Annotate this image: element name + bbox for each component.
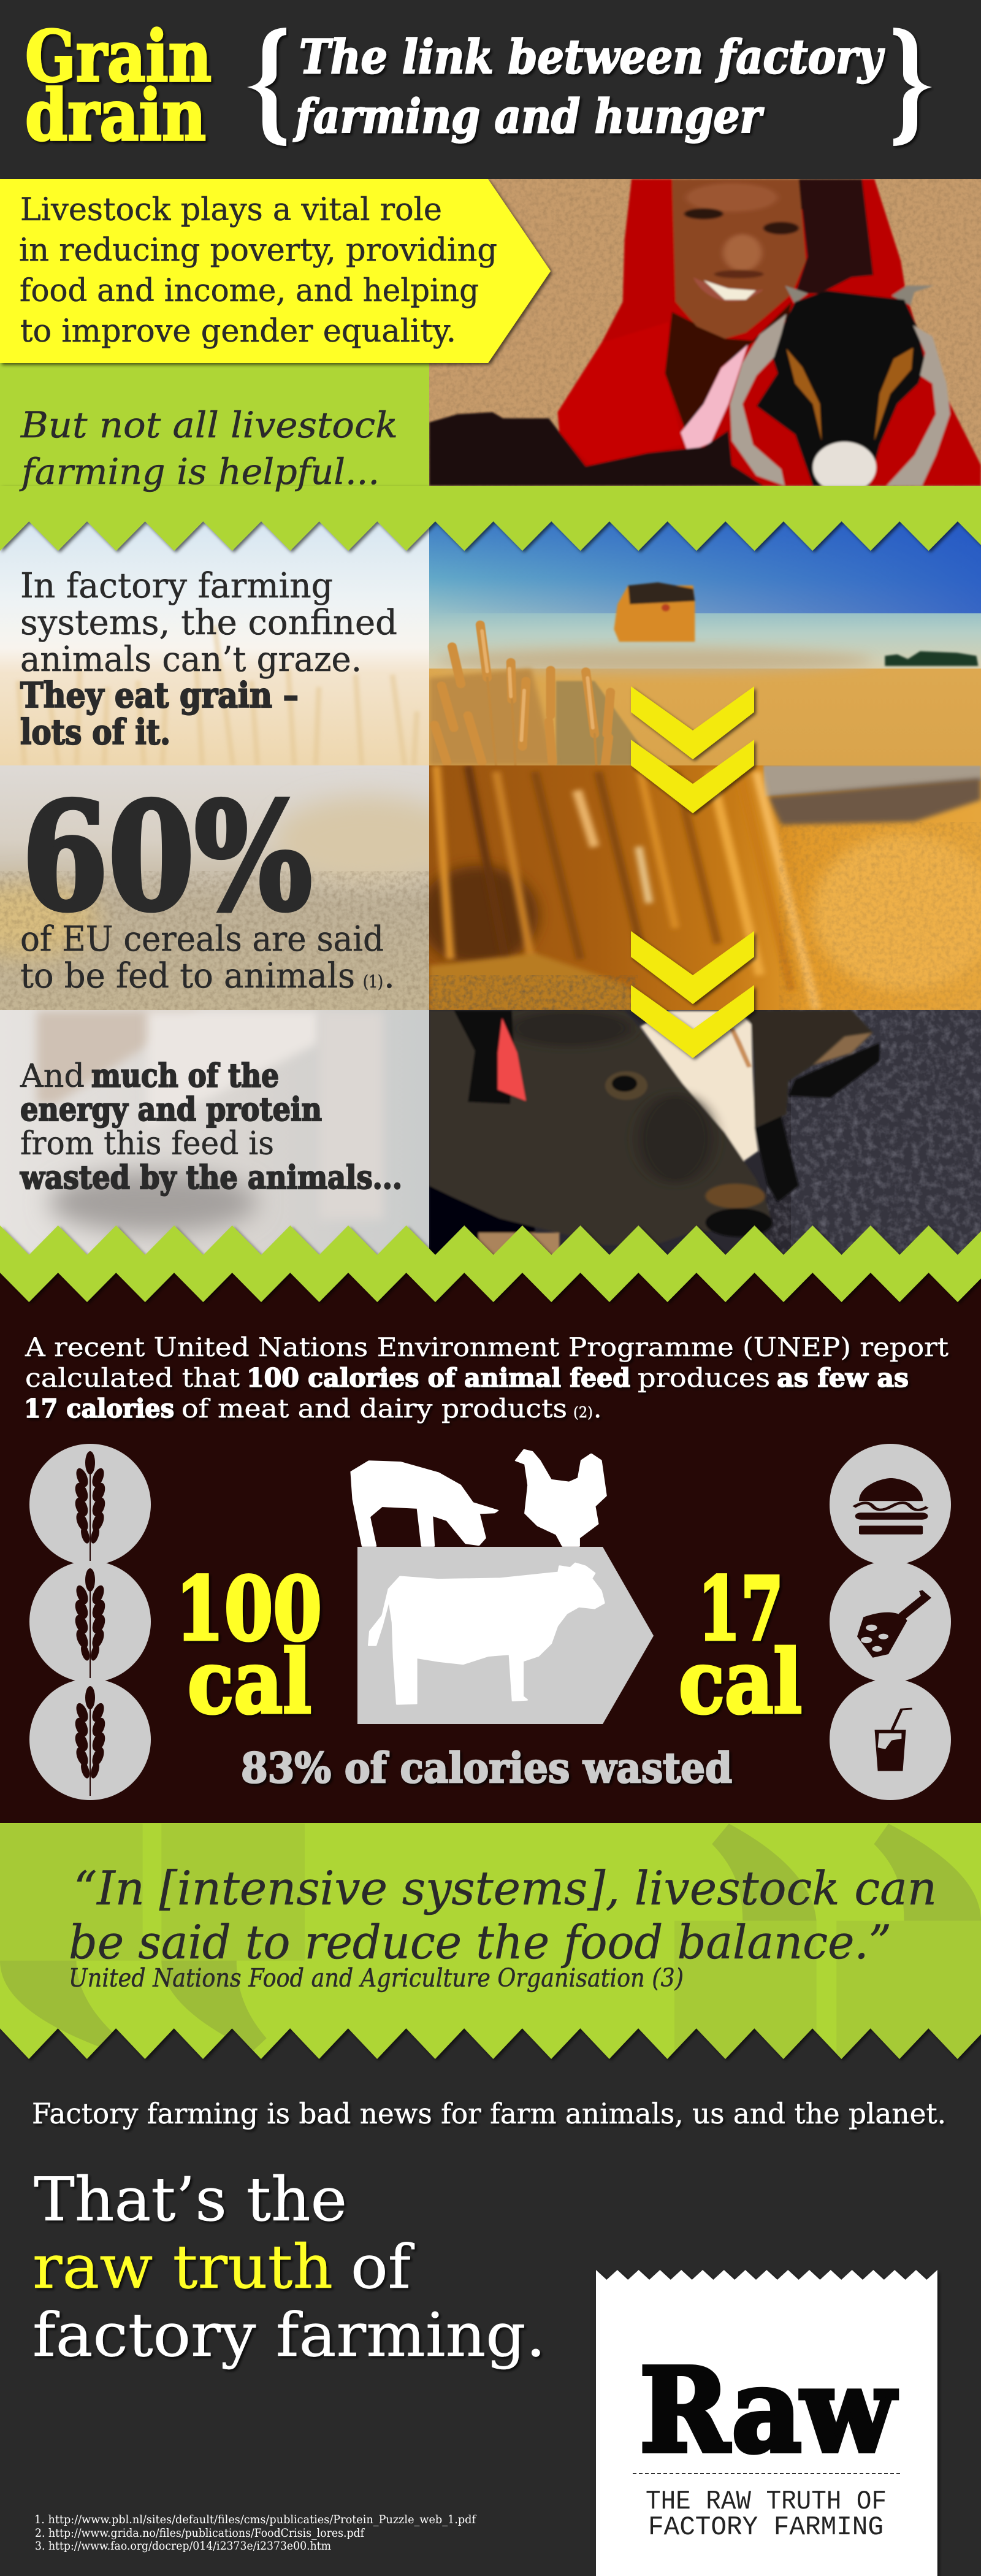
text: factory farming systems: In factory farming — [20, 566, 333, 606]
panel: brown calories background — [0, 1263, 981, 1823]
text: UNEP report — [24, 1332, 949, 1424]
icon: drink — [875, 1709, 912, 1771]
panel: left pale photo column — [0, 515, 460, 1268]
text: but not all livestock — [19, 404, 398, 493]
text: energy and protein wasted: from this feed is — [20, 1125, 274, 1162]
quote attribution: United Nations Food and Agriculture Organisation (3) — [69, 1963, 684, 1993]
icons: food circles — [830, 1444, 951, 1800]
number: 100 cal: 100 — [175, 1558, 322, 1660]
photo: combine harvester in wheat field — [429, 521, 981, 765]
text: but not all livestock: farming is helpful... — [19, 451, 380, 493]
number: 100 cal — [175, 1558, 322, 1733]
callout: yellow livestock box — [0, 179, 551, 363]
icon: pig — [351, 1461, 497, 1546]
quote text: be said to reduce the food balance.” — [69, 1915, 891, 1969]
text: UNEP report: (2) — [573, 1404, 593, 1421]
logo word: Raw — [639, 2343, 897, 2478]
text: 83 percent wasted: 83% of calories wasted — [241, 1744, 732, 1792]
icon: ham — [857, 1591, 929, 1658]
panel: green intro background — [0, 343, 429, 540]
panel: cow pale — [0, 1010, 429, 1268]
photo: falling grain — [429, 765, 981, 1010]
text: factory farming systems — [20, 566, 397, 753]
text: UNEP report: produces — [638, 1363, 770, 1393]
icon: left brace — [247, 28, 286, 146]
text: 60 percent statistic: (1) — [363, 972, 383, 992]
icon: cow — [369, 1563, 604, 1704]
number: 17 cal — [679, 1558, 802, 1733]
callout: yellow livestock box: Livestock plays a vital role — [20, 192, 442, 228]
text: UNEP report: of meat and dairy products — [181, 1393, 567, 1424]
callout: yellow livestock box: in reducing poverty, providing — [19, 232, 497, 269]
callout: yellow livestock box: food and income, and helping — [20, 273, 479, 309]
number: 17 cal: 17 — [698, 1558, 784, 1660]
divider: top green zigzag — [0, 486, 981, 551]
text: UNEP report: calculated that — [25, 1363, 240, 1393]
heading: raw truth: That’s the — [34, 2165, 347, 2235]
text: factory farming systems: animals can’t graze. — [20, 640, 362, 680]
panel: Raw logo card — [596, 2270, 937, 2576]
heading: raw truth: of — [351, 2233, 415, 2302]
subtitle: The link between factory — [299, 29, 885, 84]
panel: header — [25, 15, 932, 156]
quote text — [69, 1861, 937, 1969]
text: footnotes — [34, 2513, 477, 2553]
logo tagline: FACTORY FARMING — [648, 2512, 884, 2543]
heading: raw truth: factory farming. — [32, 2301, 546, 2371]
text: energy and protein wasted: much of the — [91, 1057, 279, 1095]
text: factory farming systems: lots of it. — [20, 712, 170, 753]
logo tagline: THE RAW TRUTH OF — [646, 2486, 887, 2517]
text: energy and protein wasted: wasted by the animals... — [20, 1159, 402, 1197]
icon: burger — [854, 1478, 928, 1535]
text: 60 percent statistic: to be fed to animals — [20, 956, 355, 996]
panel: wheat pale — [0, 515, 429, 765]
icon: right brace — [893, 28, 932, 146]
text: but not all livestock: But not all livestock — [20, 404, 398, 446]
heading: raw truth: raw truth — [32, 2233, 333, 2302]
text: UNEP report: A recent United Nations Environment Programme (UNEP) report — [25, 1332, 949, 1362]
divider: lower green zigzag — [0, 1225, 981, 1302]
text: 60 percent statistic: of EU cereals are said — [20, 919, 384, 959]
text: 60 percent statistic: 60% — [22, 770, 312, 943]
number: 100 cal: cal — [188, 1631, 311, 1733]
icons: pig, chicken, cow — [351, 1450, 606, 1704]
text: energy and protein wasted: And — [20, 1058, 85, 1095]
heading: raw truth — [32, 2165, 546, 2371]
subtitle: farming and hunger — [293, 89, 764, 144]
text: 60 percent statistic: . — [384, 956, 395, 996]
text: bad news line: Factory farming is bad news for farm animals, us and the planet. — [32, 2097, 946, 2130]
number: 17 cal: cal — [679, 1631, 802, 1733]
text: UNEP report: 100 calories of animal feed — [246, 1363, 630, 1393]
text: UNEP report: 17 calories — [24, 1393, 174, 1424]
quote text: “In [intensive systems], livestock can — [74, 1861, 937, 1915]
panel: quote green — [0, 1823, 981, 2059]
text: footnotes: 2. http://www.grida.no/files/publications/FoodCrisis_lores.pdf — [35, 2526, 365, 2540]
text: UNEP report: . — [594, 1393, 601, 1424]
icon: large quote marks — [0, 1823, 981, 2059]
text: energy and protein wasted — [20, 1057, 402, 1197]
title: Grain drain — [25, 15, 212, 156]
photo: girl and goat — [429, 179, 981, 486]
photo: black cow feeding — [429, 1010, 981, 1255]
text: footnotes: 3. http://www.fao.org/docrep/014/i2373e/i2373e00.htm — [35, 2539, 331, 2553]
logo tagline — [646, 2486, 887, 2543]
panel: grain pale — [0, 765, 460, 1011]
subtitle — [293, 29, 885, 144]
arrows: yellow chevrons — [631, 686, 754, 1058]
callout: yellow livestock box: to improve gender equality. — [20, 313, 456, 350]
text: factory farming systems: systems, the confined — [20, 603, 397, 643]
arrow: grey conversion arrow — [357, 1547, 654, 1724]
icon: chicken — [516, 1450, 606, 1546]
text: UNEP report: as few as — [777, 1363, 909, 1393]
text: footnotes: 1. http://www.pbl.nl/sites/default/files/cms/publicaties/Protein_Puzzle_web_1.pdf — [34, 2513, 477, 2526]
text: energy and protein wasted: energy and protein — [20, 1091, 322, 1129]
title: Grain drain: Grain — [25, 15, 212, 98]
icons: wheat circles — [29, 1444, 151, 1800]
title: Grain drain: drain — [25, 74, 206, 156]
text: factory farming systems: They eat grain – — [20, 675, 299, 716]
